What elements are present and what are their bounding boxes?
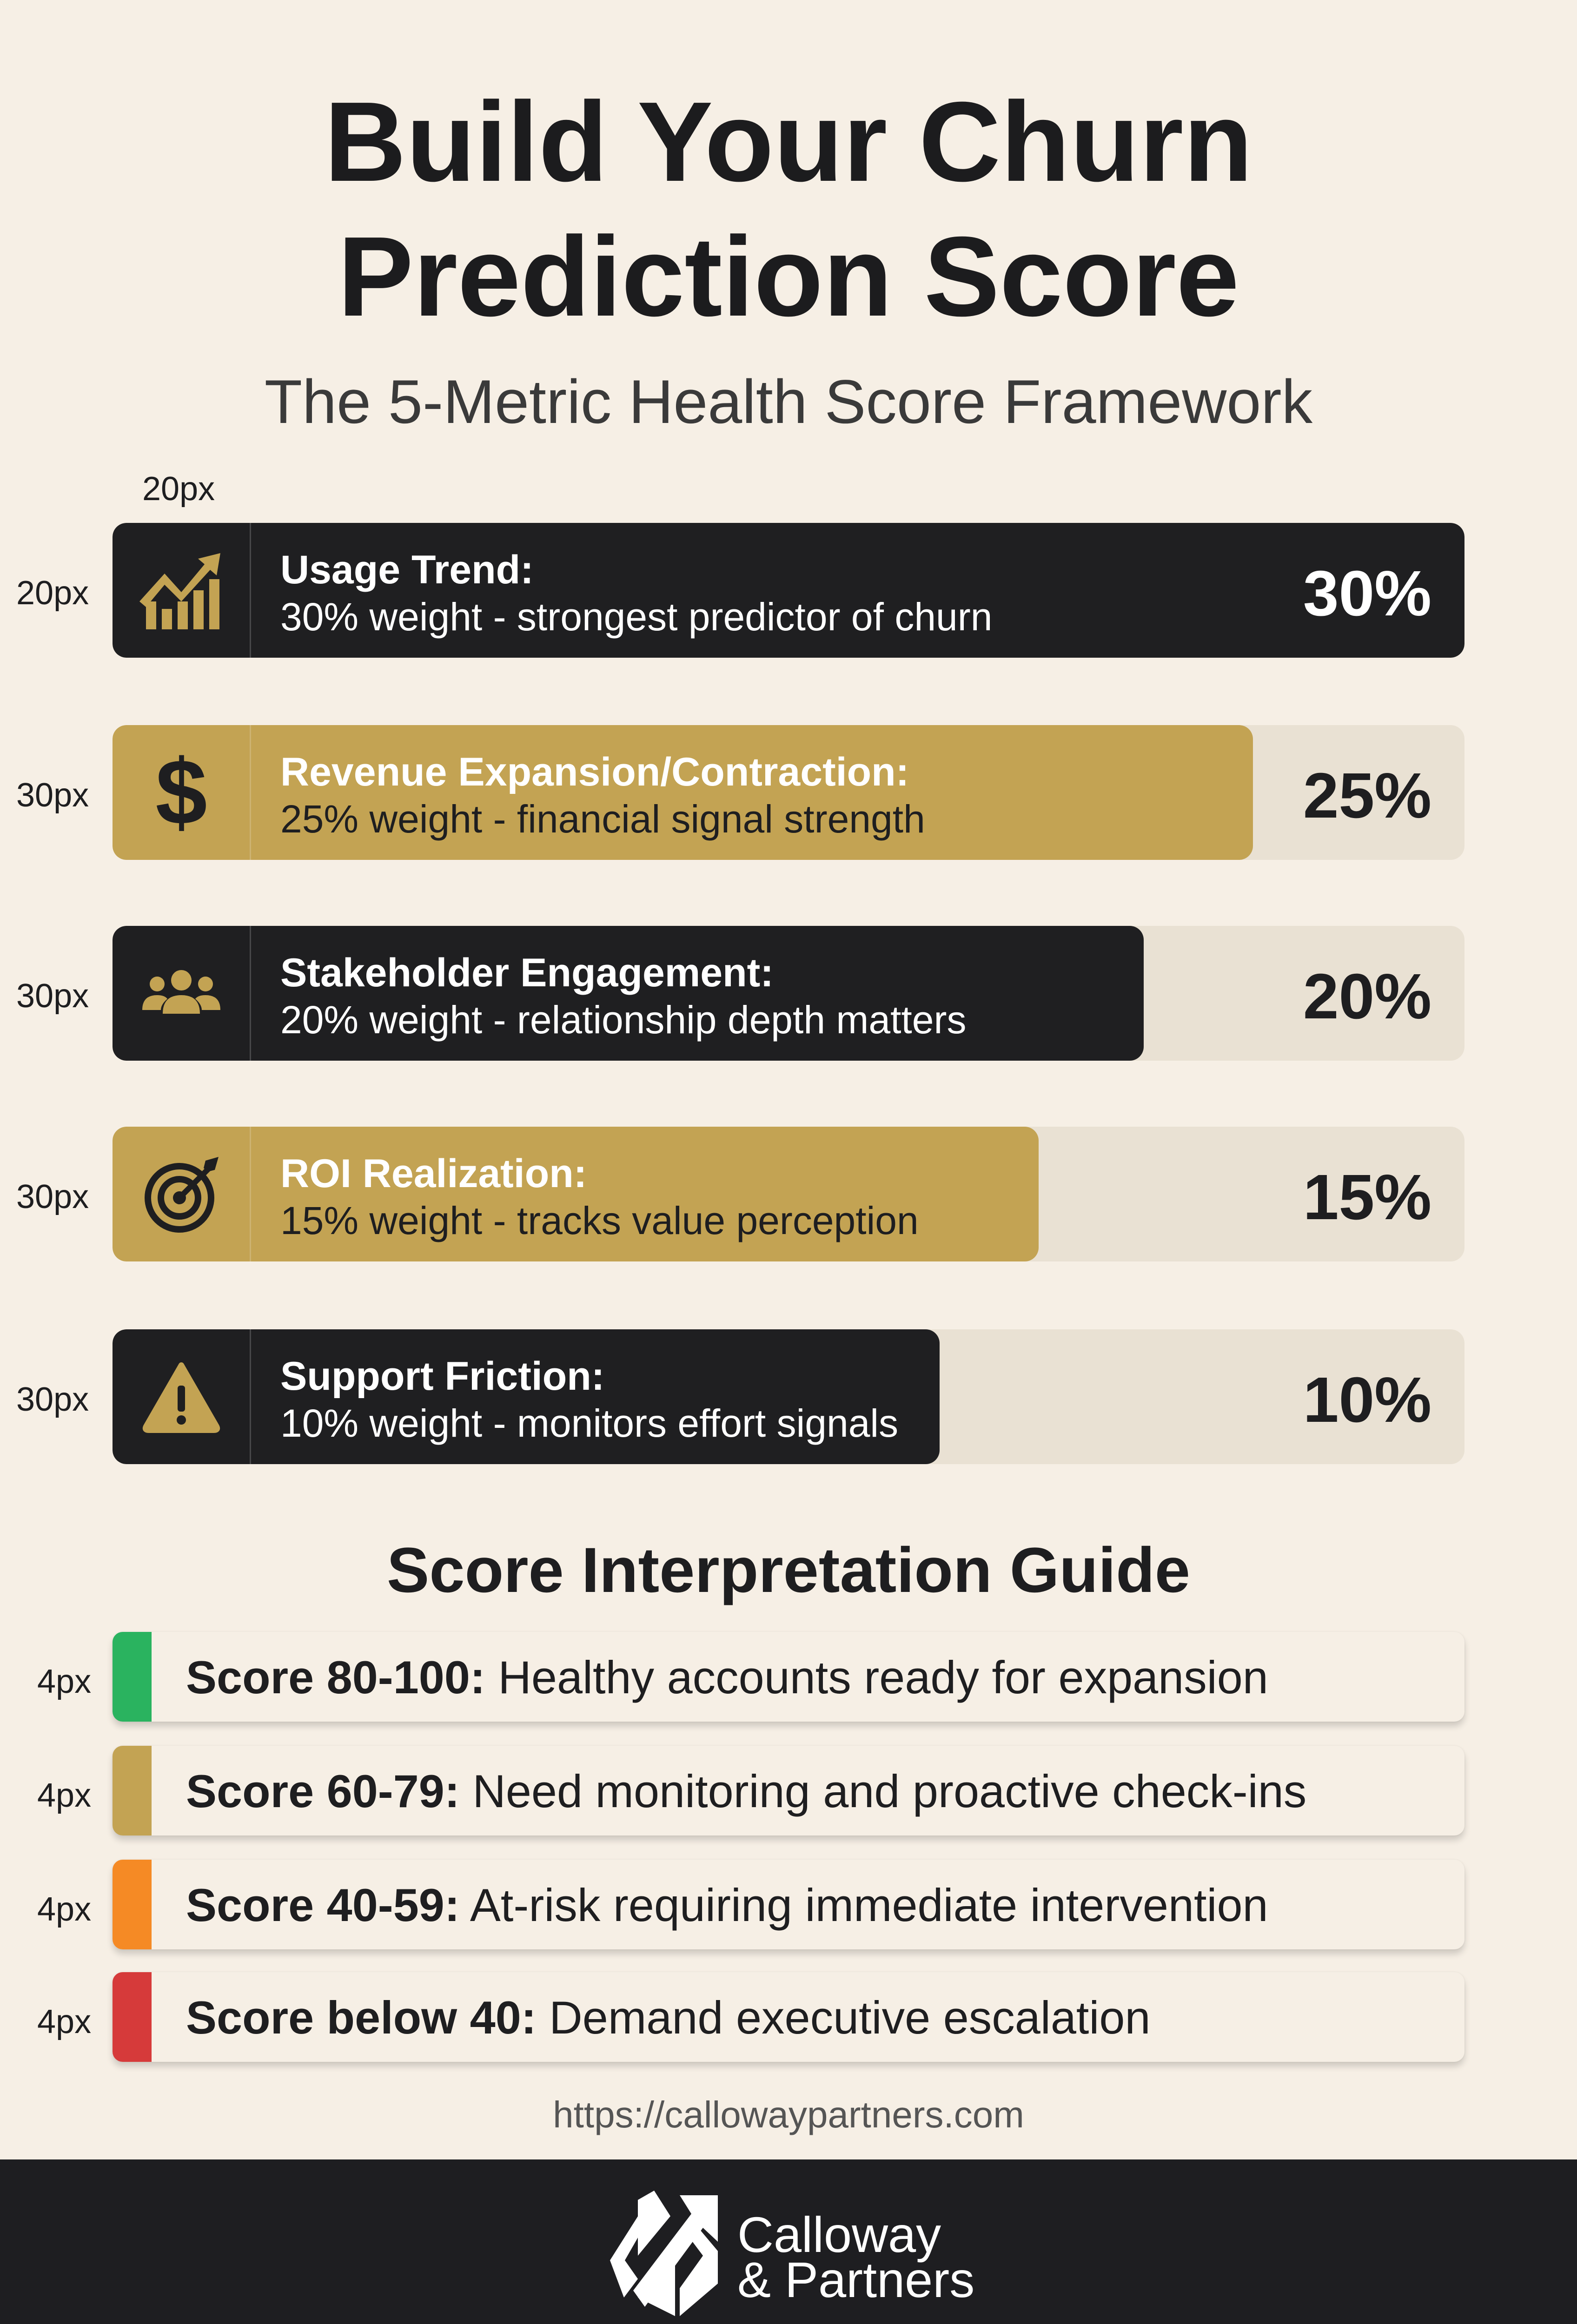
icon: target	[135, 1148, 228, 1241]
bar: support friction: 10% weight - monitors effort signals	[280, 1401, 898, 1445]
bar: usage trend: Usage Trend:	[280, 548, 534, 592]
label: 20px: 20px	[16, 574, 89, 612]
row: 40-59	[113, 1860, 1464, 1949]
bar: revenue: 25%	[1303, 760, 1431, 832]
label: 4px: 4px	[37, 1777, 91, 1814]
title: Build Your Churn	[324, 78, 1253, 205]
bar: ROI	[113, 1127, 1464, 1261]
label: 4px: 4px	[37, 1891, 91, 1928]
bar: revenue: 25% weight - financial signal strength	[280, 797, 925, 841]
row: 60-79: Score 60-79: Need monitoring and proactive check-ins	[186, 1765, 1306, 1817]
row: 60-79	[113, 1746, 1464, 1835]
bar: stakeholder: Stakeholder Engagement:	[280, 951, 774, 995]
bar: ROI: 15% weight - tracks value perception	[280, 1199, 919, 1242]
icon: growth chart	[135, 544, 228, 637]
bar: usage trend	[113, 523, 1464, 658]
label: 4px: 4px	[37, 1663, 91, 1700]
logo icon	[610, 2191, 718, 2316]
bar: support friction	[113, 1329, 1464, 1464]
row: below 40: Score below 40: Demand executive escalation	[186, 1992, 1151, 2043]
bar: revenue: Revenue Expansion/Contraction:	[280, 750, 909, 794]
row: 80-100	[113, 1632, 1464, 1722]
row: 40-59: Score 40-59: At-risk requiring immediate intervention	[186, 1879, 1268, 1931]
url: https://callowaypartners.com	[553, 2094, 1024, 2135]
footer	[0, 2159, 1577, 2324]
label: 30px: 30px	[16, 1178, 89, 1215]
bar: usage trend: 30% weight - strongest predictor of churn	[280, 595, 992, 639]
bar: ROI: ROI Realization:	[280, 1151, 587, 1196]
icon: people	[135, 947, 228, 1040]
label: 30px: 30px	[16, 1381, 89, 1418]
bar: stakeholder: 20% weight - relationship depth matters	[280, 998, 966, 1042]
label: 30px: 30px	[16, 777, 89, 814]
row: below 40	[113, 1972, 1464, 2062]
spacing label: 20px	[142, 470, 215, 508]
title: Prediction Score	[338, 213, 1239, 340]
logo text: Calloway	[737, 2206, 941, 2263]
bar: revenue	[113, 725, 1464, 860]
icon: warning	[135, 1350, 228, 1443]
logo text	[737, 2212, 974, 2302]
title	[0, 74, 1577, 344]
row: 80-100: Score 80-100: Healthy accounts ready for expansion	[186, 1651, 1268, 1703]
bar: stakeholder: 20%	[1303, 961, 1431, 1032]
bar: usage trend: 30%	[1303, 558, 1431, 629]
bar: support friction: 10%	[1303, 1364, 1431, 1436]
label: 30px: 30px	[16, 977, 89, 1015]
logo text: & Partners	[737, 2251, 974, 2308]
bar: ROI: 15%	[1303, 1162, 1431, 1233]
bar: stakeholder	[113, 926, 1464, 1061]
heading: score guide: Score Interpretation Guide	[387, 1535, 1190, 1606]
subtitle: The 5-Metric Health Score Framework	[265, 368, 1312, 436]
label: 4px: 4px	[37, 2003, 91, 2040]
bar: support friction: Support Friction:	[280, 1354, 604, 1399]
